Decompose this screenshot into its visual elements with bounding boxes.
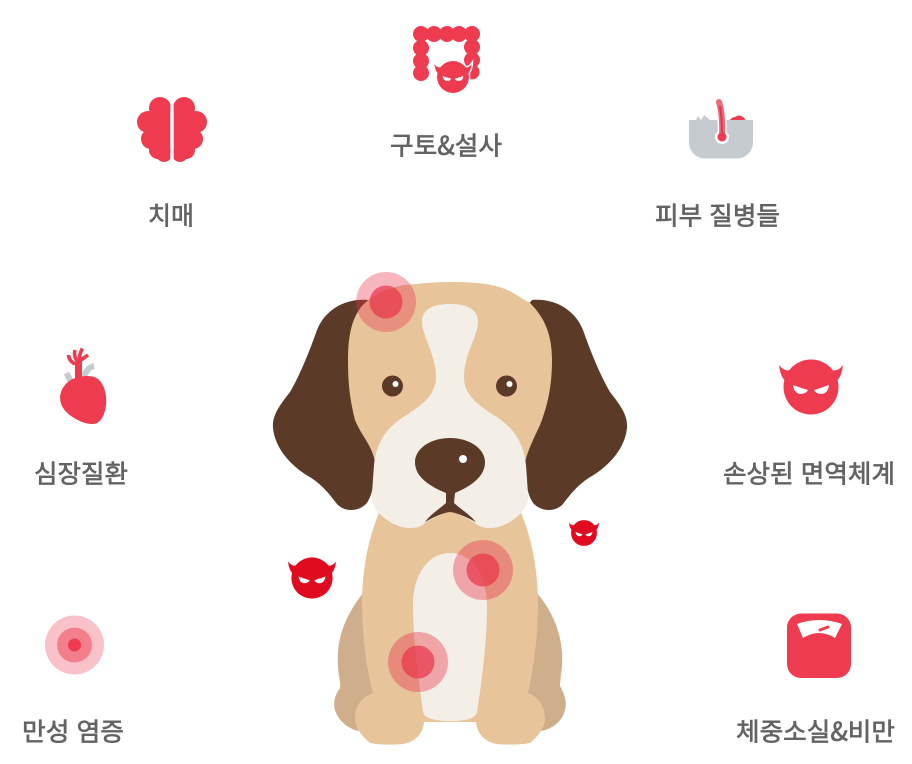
pulse: head — [356, 272, 416, 332]
eyes — [382, 376, 517, 396]
icon: scale — [787, 614, 851, 678]
icon: devil weak immune — [779, 360, 843, 414]
icon: devil left of dog — [288, 557, 336, 599]
illustration: dog — [273, 282, 627, 745]
heading: dementia: 치매 — [148, 196, 194, 232]
heading: chronic inflammation: 만성 염증 — [22, 712, 124, 748]
nose highlight — [459, 455, 467, 463]
heading: vomiting and diarrhea: 구토&설사 — [390, 126, 502, 162]
icon: devil right of dog — [569, 520, 599, 546]
nose and mouth — [415, 438, 485, 522]
heading: weight loss and obesity: 체중소실&비만 — [736, 712, 895, 748]
haunches — [334, 592, 566, 731]
heading: heart disease: 심장질환 — [34, 454, 128, 490]
heading: damaged immune system: 손상된 면역체계 — [723, 454, 895, 490]
pulse: leg — [388, 632, 448, 692]
chest patch — [413, 553, 487, 721]
icon: colon with devil — [413, 26, 480, 93]
heading: skin diseases: 피부 질병들 — [655, 196, 780, 232]
head — [348, 282, 552, 500]
pulse: chest — [453, 540, 513, 600]
icon: inflammation — [45, 616, 104, 674]
left ear — [273, 300, 385, 510]
icon: brain — [137, 97, 207, 162]
icon: heart — [60, 348, 106, 424]
body — [355, 510, 545, 745]
face blaze and muzzle — [372, 304, 528, 528]
right ear — [515, 300, 627, 510]
icon: skin — [689, 101, 753, 158]
